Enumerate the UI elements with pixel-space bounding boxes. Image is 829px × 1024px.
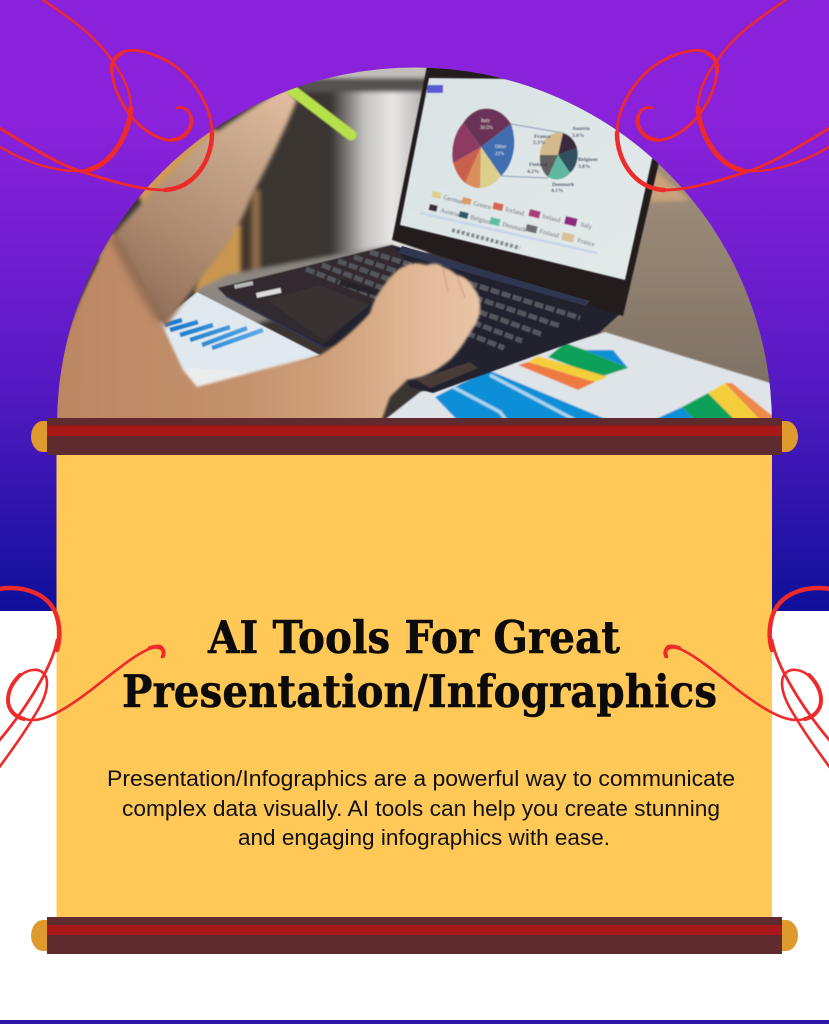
screen legend: [429, 191, 595, 248]
lower arm and typing hand: [40, 233, 480, 430]
large pie chart: 21%: [495, 152, 504, 157]
large pie chart: 30.5%: [480, 126, 493, 131]
pie value labels: France: [534, 134, 551, 140]
yellow scroll panel: [56, 455, 772, 917]
laptop screen: [400, 78, 668, 280]
top scroll roller: [31, 418, 798, 455]
laptop screen bezel: [392, 66, 672, 316]
red swirl: top right: [617, 0, 829, 190]
red swirl: top left: [0, 0, 212, 190]
gradient background band: [0, 0, 829, 611]
finger creases: [443, 268, 465, 298]
red swirl: lower right: [665, 588, 829, 769]
photo: laptop with charts in arch: [40, 60, 790, 430]
bottom edge band: [0, 1020, 829, 1024]
screen legend: Germany: [443, 194, 468, 207]
pie value labels: Finland: [529, 162, 547, 168]
description text: and engaging infographics with ease.: [238, 825, 610, 850]
bottom roller right cap: [782, 920, 798, 951]
screen legend: France: [577, 237, 595, 248]
pie value labels: Belgium: [578, 157, 598, 163]
bottom roller left cap: [31, 920, 47, 951]
large pie chart: [452, 108, 514, 188]
large pie chart: Other: [495, 145, 507, 150]
screen legend: Belgium: [470, 214, 493, 226]
pie value labels: 3.8%: [578, 164, 590, 170]
large pie chart: Italy: [481, 119, 491, 124]
bottom scroll roller: [31, 917, 798, 954]
screen legend: Iceland: [505, 206, 525, 218]
pie value labels: [527, 126, 598, 194]
green highlighter pen: [292, 90, 351, 135]
roller left cap: [31, 421, 47, 452]
pie value labels: 4.2%: [527, 169, 539, 175]
photo backdrop: [50, 60, 790, 430]
description text: Presentation/Infographics are a powerful way to communicate: [107, 766, 735, 791]
screen legend: Italy: [580, 221, 593, 231]
roller right cap: [782, 421, 798, 452]
right paper with charts: [378, 332, 780, 425]
pie value labels: Denmark: [552, 182, 575, 188]
screen legend: Finland: [539, 228, 560, 240]
screen legend: Greece: [473, 200, 492, 211]
title: AI Tools For Great: [207, 611, 620, 664]
arm fold shadow: [113, 236, 160, 320]
pie value labels: 5.3%: [533, 140, 545, 146]
small pie chart: [540, 132, 578, 180]
screen legend: Ireland: [542, 213, 562, 225]
laptop hinge strip: [398, 246, 590, 306]
red swirl: lower left: [0, 588, 164, 769]
pie connector lines: [501, 124, 563, 178]
title: Presentation/Infographics: [122, 665, 717, 718]
left paper with blue bars: [150, 292, 320, 392]
screen legend: Austria: [440, 207, 460, 219]
screen legend: Denmark: [502, 221, 527, 234]
title: [122, 611, 717, 718]
laptop base and keyboard: [218, 245, 622, 393]
pie value labels: 3.6%: [572, 133, 584, 139]
upper arm holding pen: [95, 86, 297, 328]
pie value labels: Austria: [572, 126, 590, 132]
description text: complex data visually. AI tools can help you create stunning: [122, 796, 720, 821]
description text: [107, 766, 735, 850]
pie value labels: 4.1%: [551, 188, 563, 194]
